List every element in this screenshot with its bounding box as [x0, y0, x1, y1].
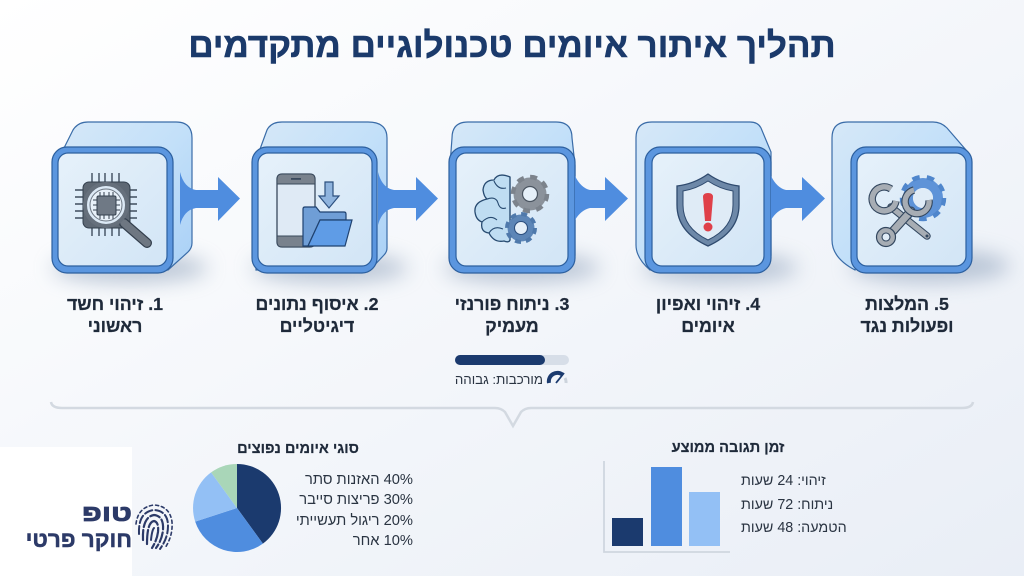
step 5: recommendations: [832, 122, 1010, 336]
icon: wrenches and gear: [872, 177, 944, 246]
arrow 1: [180, 172, 240, 225]
label: step 3: 3. ניתוח פורנזי: [455, 294, 569, 314]
panel: average response time: [604, 440, 847, 552]
heading: threat types: סוגי איומים נפוצים: [237, 441, 359, 457]
label: step 1: 1. זיהוי חשד: [67, 294, 163, 314]
label: step 2: [256, 294, 379, 336]
logo: טופ: [82, 500, 132, 526]
icon: chip under magnifier: [75, 173, 147, 243]
label: step 4: איומים: [681, 316, 735, 336]
pie legend: 30% פריצות סייבר: [299, 492, 413, 508]
complexity meter: [455, 355, 569, 387]
label: step 5: ופעולות נגד: [860, 316, 954, 336]
logo: חוקר פרטי: [26, 527, 132, 552]
step 4: threat identification: [636, 122, 798, 336]
pie legend: 20% ריגול תעשייתי: [296, 512, 413, 529]
label: step 4: [656, 294, 760, 336]
pie legend: 40% האזנות סתר: [305, 472, 413, 488]
icon: fingerprint: [136, 505, 172, 549]
arrow 3: [575, 176, 628, 221]
icon: shield with exclamation: [677, 174, 739, 246]
panel: common threat types: [193, 441, 413, 552]
label: step 3: [455, 294, 569, 336]
label: step 5: 5. המלצות: [865, 294, 949, 314]
bar chart: [604, 461, 730, 552]
complexity meter: מורכבות: גבוהה: [455, 372, 543, 387]
icon: brain and gears: [475, 175, 547, 242]
label: step 1: [67, 294, 163, 336]
step 1: initial suspicion: [52, 122, 208, 336]
step 3: forensic analysis: [444, 122, 600, 336]
pie chart: [193, 464, 281, 552]
heading: response time: זמן תגובה ממוצע: [672, 440, 785, 456]
icon: gauge: [549, 373, 566, 383]
label: step 1: ראשוני: [88, 316, 142, 336]
title: תהליך איתור איומים טכנולוגיים מתקדמים: [188, 26, 836, 65]
bar values: [741, 473, 847, 536]
step 2: data collection: [252, 122, 408, 336]
bar values: ניתוח: 72 שעות: [741, 497, 833, 513]
logo background panel: [0, 447, 132, 576]
arrow 4: [771, 176, 825, 221]
pie legend: 10% אחר: [353, 533, 413, 549]
arrow 2: [378, 172, 438, 225]
logo: [26, 500, 172, 552]
pie legend: [296, 472, 413, 549]
bar values: הטמעה: 48 שעות: [741, 520, 847, 536]
label: step 2: דיגיטליים: [280, 316, 354, 336]
label: step 4: 4. זיהוי ואפיון: [656, 294, 760, 314]
bracket divider: [51, 402, 973, 426]
bar values: זיהוי: 24 שעות: [741, 473, 826, 489]
label: step 3: מעמיק: [485, 316, 539, 336]
label: step 5: [860, 294, 954, 336]
icon: phone and folder: [277, 174, 352, 247]
label: step 2: 2. איסוף נתונים: [256, 294, 379, 314]
